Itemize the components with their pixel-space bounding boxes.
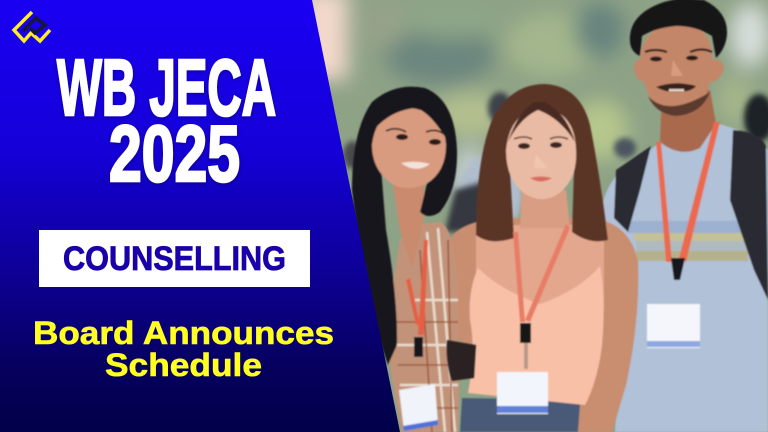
photo: students background xyxy=(300,0,768,432)
panel: blue slanted background xyxy=(0,0,400,432)
eyes and brows xyxy=(645,50,712,52)
person: female student left xyxy=(352,87,459,432)
bag under arm xyxy=(447,340,476,381)
face xyxy=(506,108,576,199)
hair xyxy=(352,87,457,365)
eyes and lips xyxy=(514,137,568,139)
shirt stripes xyxy=(628,221,748,261)
id badge xyxy=(647,304,700,348)
id badge xyxy=(399,384,438,430)
lanyard xyxy=(513,232,525,322)
jeans xyxy=(460,398,590,432)
title: WB JECA 2025 xyxy=(57,43,276,198)
hair xyxy=(630,0,727,58)
person: male student right xyxy=(600,0,768,432)
lanyard xyxy=(656,142,672,262)
peach top xyxy=(468,266,604,405)
chest xyxy=(476,225,604,310)
title: WB JECA 2025: WB JECA xyxy=(57,43,276,132)
title: WB JECA 2025: 2025 xyxy=(109,109,240,198)
shoulders and arms xyxy=(449,218,638,432)
eyes and smile xyxy=(386,129,444,134)
backpack straps xyxy=(614,146,651,232)
subtitle: board announces schedule: Board Announces xyxy=(33,315,334,351)
icon: logo xyxy=(14,12,50,41)
blurred campus background xyxy=(300,0,768,432)
plaid shirt xyxy=(385,222,459,432)
subtitle: board announces schedule xyxy=(33,315,334,383)
lanyard xyxy=(418,240,428,335)
id badge xyxy=(497,372,548,414)
banner: counselling: COUNSELLING xyxy=(63,240,286,278)
neck xyxy=(392,180,424,268)
neck xyxy=(520,190,570,228)
subtitle: board announces schedule: Schedule xyxy=(105,347,262,383)
beard and mouth xyxy=(656,83,696,92)
neck xyxy=(660,90,716,152)
banner: counselling xyxy=(39,230,310,287)
person: female student centre xyxy=(449,84,638,432)
face xyxy=(372,108,446,188)
face xyxy=(634,24,724,116)
hair xyxy=(476,84,608,241)
